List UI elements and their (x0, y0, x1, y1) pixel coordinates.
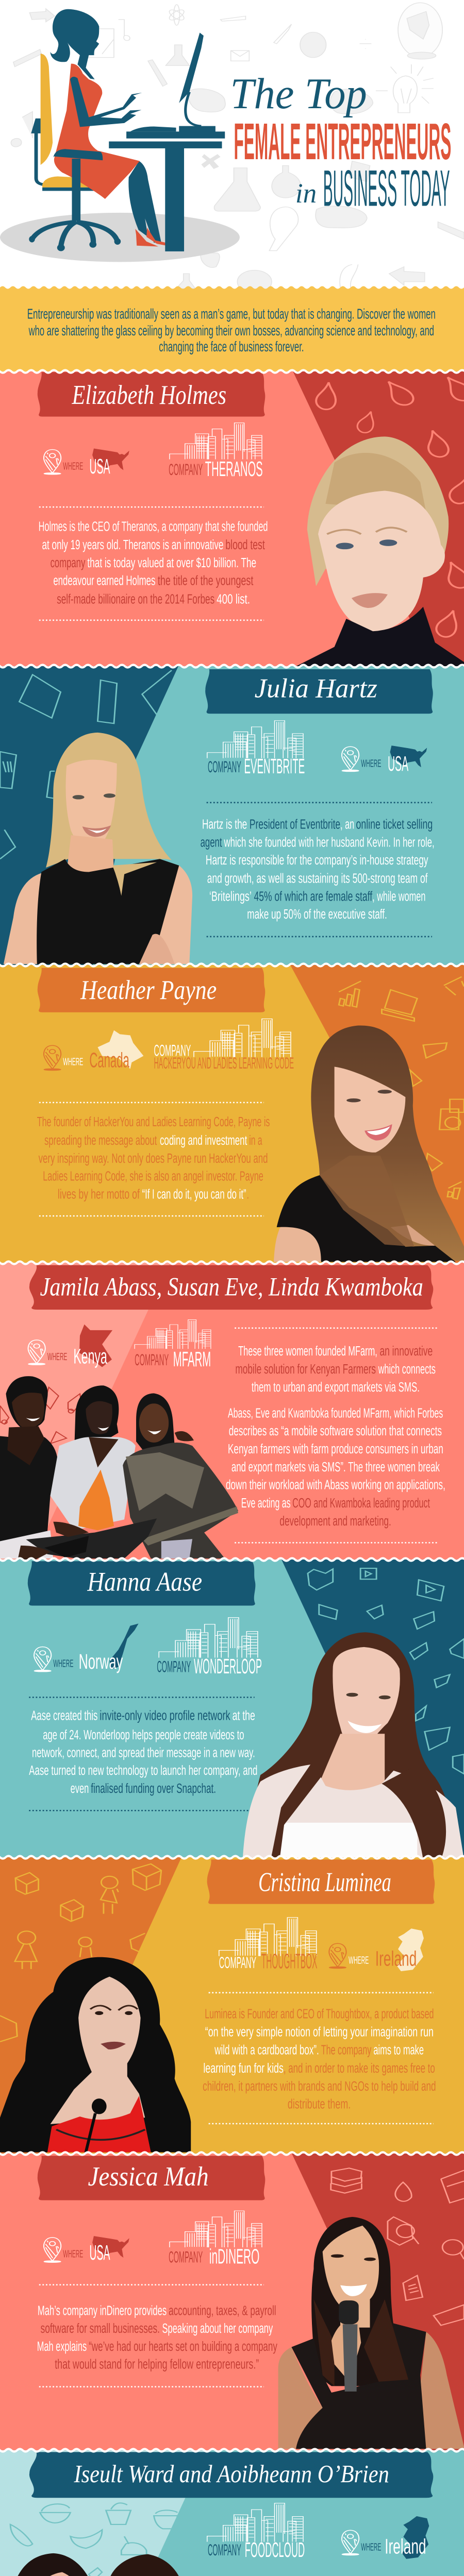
text: Aase bio: invite-only video profile network (100, 1708, 230, 1723)
intro text (27, 306, 436, 354)
panel: Heather Payne (0, 965, 464, 1263)
text: Mah bio: Mah explains (37, 2339, 87, 2354)
location: Ireland (342, 2516, 429, 2559)
text: Payne bio: “If I can do it, you can do it” (142, 1187, 246, 1201)
doodles: books and calculators (331, 2168, 464, 2325)
ribbon: names (29, 1265, 433, 1310)
portrait: Elizabeth Holmes (291, 436, 464, 669)
location: USA: WHERE (63, 461, 83, 472)
company: Foodcloud: COMPANY (208, 2541, 241, 2559)
company: Wonderloop: COMPANY (157, 1657, 191, 1675)
location: Norway: Norway (79, 1650, 123, 1673)
panel: Jamila Abass, Susan Eve, Linda Kwamboka (0, 1263, 464, 1560)
location: Ireland (329, 1928, 424, 1971)
company: MFarm: COMPANY (135, 1351, 169, 1369)
panel: introduction (0, 285, 464, 372)
portrait: Aoibheann O'Brien (107, 2554, 252, 2576)
title: The Top (230, 70, 367, 118)
panel: Jamila Abass, Susan Eve, Linda Kwamboka: Kenya (73, 1345, 107, 1368)
text: Payne bio: lives by her motto of (58, 1187, 140, 1201)
text: Luminea bio: distribute them. (288, 2096, 351, 2111)
doodles: boxes and children (0, 1864, 161, 2042)
photo: three founders (0, 1376, 238, 1560)
panel: Iseult Ward and Aoibheann O'Brien (0, 2450, 464, 2576)
panel: Jamila Abass, Susan Eve, Linda Kwamboka: MFARM (173, 1348, 211, 1371)
text: Luminea bio (203, 2006, 436, 2111)
portrait: Jessica Mah (278, 2217, 464, 2449)
location: USA (43, 448, 129, 475)
doodles: food (10, 2503, 177, 2576)
text: MFarm bio: Eve acting as (241, 1496, 291, 1511)
background doodles (11, 3, 464, 293)
company: Thoughtbox: COMPANY (219, 1953, 256, 1972)
portrait: Iseult Ward (0, 2553, 120, 2576)
text: Payne bio: coding and investment (160, 1133, 247, 1148)
location: Canada: WHERE (63, 1056, 83, 1068)
ribbon: name (205, 669, 433, 714)
text: Aase bio: even (71, 1781, 89, 1796)
location: USA: WHERE (361, 758, 381, 769)
text: Aase bio: finalised funding over Snapchat. (91, 1781, 216, 1796)
panel: Hanna Aase: WONDERLOOP (194, 1655, 262, 1678)
company: inDinero (169, 2211, 262, 2268)
location: Canada: Canada (89, 1048, 129, 1072)
location: USA: USA (89, 455, 110, 478)
ribbon: name: Elizabeth Holmes (72, 380, 226, 410)
text: Payne bio: in a (249, 1133, 262, 1148)
location: Canada (44, 1030, 143, 1072)
ribbon: name: Hanna Aase (87, 1567, 202, 1597)
text: Holmes bio: at only 19 years old. Theranos is an innovative (42, 537, 223, 552)
location: USA (44, 2236, 129, 2264)
panel: Jessica Mah: inDINERO (209, 2245, 259, 2268)
panel: Iseult Ward and Aoibheann O'Brien: FOODCLOUD (245, 2538, 305, 2562)
portrait: Cristina Luminea (0, 1957, 191, 2153)
doodles: video cameras and play buttons (308, 1568, 464, 1774)
desk and computer (109, 32, 225, 251)
panel: Cristina Luminea (0, 1857, 464, 2154)
location: Kenya: WHERE (47, 1351, 67, 1363)
company: MFarm (135, 1320, 211, 1371)
text: Holmes bio: the title of the youngest (158, 573, 254, 588)
text: Luminea bio: wild with a cardboard box”. (214, 2042, 319, 2057)
text: Luminea bio: learning fun for kids (203, 2061, 284, 2076)
location: Norway: WHERE (53, 1658, 73, 1670)
ribbon: heather name (38, 968, 265, 1012)
text: Hartz bio: Hartz is the (202, 817, 247, 832)
text: Payne bio: . (247, 1187, 249, 1201)
header illustration and title (0, 3, 464, 293)
text: Mah bio: Mah’s company inDinero provides (38, 2303, 167, 2318)
location: Ireland: WHERE (361, 2541, 381, 2553)
ribbon: name (28, 1561, 255, 1606)
company: Thoughtbox (219, 1918, 317, 1973)
company: HackerYou and Ladies Learning Code: COMPANY (154, 1041, 191, 1059)
doodles: blood drops (315, 374, 464, 638)
text: Holmes bio: self-made billionaire on the 2014 Forbes (57, 591, 214, 606)
panel: Julia Hartz: EVENTBRITE (244, 755, 305, 778)
location: Kenya (28, 1325, 112, 1368)
company: Wonderloop (157, 1618, 262, 1678)
text: Holmes bio: 400 list. (217, 591, 250, 606)
ribbon: name (38, 372, 265, 417)
company: Theranos: COMPANY (169, 460, 203, 479)
text: Payne bio: spreading the message about (44, 1133, 157, 1148)
text: Mah bio: that would stand for helping fellow entrepreneurs.” (55, 2357, 259, 2372)
location: USA (341, 745, 427, 772)
portrait: Julia Hartz (4, 733, 192, 964)
location: USA: USA (89, 2241, 110, 2264)
panel: Jessica Mah (0, 2154, 464, 2450)
doodles: charts and laptops (339, 977, 464, 1199)
location: USA: WHERE (63, 2248, 83, 2260)
text: Aase bio (29, 1708, 257, 1796)
company: Eventbrite: COMPANY (208, 757, 241, 776)
ribbon: names (29, 2452, 433, 2498)
ribbon: name (207, 1859, 435, 1904)
text: Hartz bio (201, 817, 435, 922)
title: in (295, 178, 317, 209)
text: Mah bio (37, 2303, 277, 2372)
text: Holmes bio: that is today valued at over $10 billion. The (87, 555, 256, 570)
text: Aase bio: at the (233, 1708, 255, 1723)
intro text: changing the face of business forever. (159, 338, 304, 354)
location: Ireland: Ireland (375, 1947, 417, 1971)
location: Norway (34, 1623, 139, 1673)
portrait: Heather Payne (274, 1025, 464, 1262)
company: Theranos (169, 423, 263, 481)
panel: Jessica Mah: accounting, taxes, & payroll (169, 2303, 276, 2318)
text: Aase bio: age of 24. Wonderloop helps people create videos to (43, 1727, 244, 1742)
text: Holmes bio: blood test (225, 537, 265, 552)
panel: Hanna Aase (0, 1560, 464, 1859)
panel: Elizabeth Holmes: THERANOS (205, 457, 263, 481)
panel: Jessica Mah: Speaking about her company (162, 2321, 273, 2336)
portrait: Hanna Aase (243, 1632, 464, 1859)
text: Hartz bio: President of Eventbrite (250, 817, 340, 832)
text: Holmes bio (39, 519, 268, 606)
illustration: woman working at desk (29, 9, 167, 251)
panel: Julia Hartz (0, 666, 464, 965)
company: HackerYou and Ladies Learning Code (154, 1019, 294, 1072)
text: Holmes bio: endeavour earned Holmes (53, 573, 155, 588)
ribbon: name: Jessica Mah (88, 2161, 209, 2192)
text: Hartz bio: ‘Britelings’ (209, 889, 252, 904)
text: Mah bio: software for small businesses. (41, 2321, 160, 2336)
panel: Cristina Luminea: THOUGHTBOX (261, 1950, 317, 1973)
text: Hartz bio: agent (201, 835, 222, 850)
text: Hartz bio: , an (340, 817, 354, 832)
ribbon: heather name: Heather Payne (80, 975, 217, 1005)
company: Eventbrite (207, 721, 305, 778)
panel: Elizabeth Holmes (0, 371, 464, 669)
ribbon: name: Julia Hartz (255, 673, 377, 703)
company: Foodcloud (207, 2503, 305, 2562)
floor shadow (0, 213, 240, 262)
text: Aase bio: Aase created this (31, 1708, 97, 1723)
text: Payne bio (37, 1114, 270, 1201)
doodles: documents (0, 670, 172, 859)
text: Luminea bio: The company (321, 2042, 372, 2057)
location: Ireland: WHERE (349, 1955, 369, 1966)
text: Holmes bio: company (51, 555, 86, 570)
text: MFarm bio (226, 1344, 445, 1529)
ribbon: name (38, 2156, 265, 2200)
company: inDinero: COMPANY (169, 2248, 203, 2266)
title (230, 70, 451, 217)
doodles: tablets and tractors (0, 1387, 81, 1444)
location: USA: USA (388, 752, 408, 775)
